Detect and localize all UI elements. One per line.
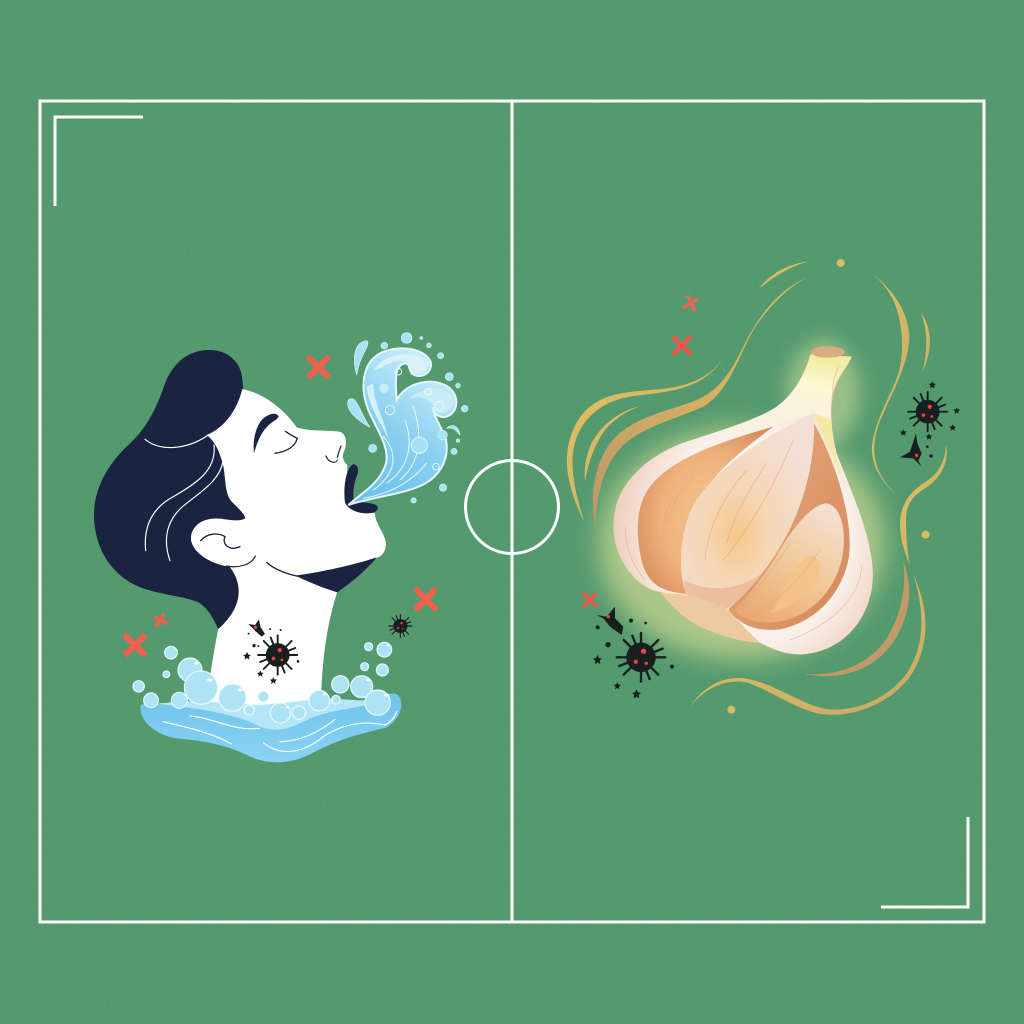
hair [94,350,253,629]
garlic glow [598,340,885,660]
virus: small on neck [243,619,299,684]
water jet from mouth [348,348,456,505]
corner mark: bottom right [881,817,968,907]
water droplets [348,333,468,503]
eyebrow [254,414,279,453]
left clove [638,427,773,594]
corner mark: top left [55,117,143,206]
hair strands [145,435,223,561]
jaw shadow [295,557,377,592]
face lines [201,431,341,577]
garlic base [660,592,760,643]
red cross marks [124,357,437,655]
red cross marks [583,297,697,606]
neck [205,550,343,712]
stem [700,354,852,437]
virus: right of neck [389,614,412,638]
panel: person gargling water [94,333,468,762]
golden dots [727,259,930,714]
right clove highlight [770,556,820,613]
foam bubbles [133,642,392,723]
stem cap [811,346,845,358]
field frame with centre line and centre circle [40,101,984,922]
centre clove [681,413,814,610]
golden aroma swirls [567,261,947,715]
panel: glowing garlic bulb [567,259,960,715]
garlic bulb [613,346,873,654]
virus: lower left small [593,607,674,698]
mouth [344,464,378,513]
virus: upper right [908,392,947,431]
skin [613,354,873,654]
face [191,389,386,576]
right clove cavity [728,423,850,630]
right clove [735,503,844,623]
virus: lower left large [617,633,665,682]
centre clove lower shade [684,573,762,610]
virus: right small [900,381,960,467]
pool of water [140,693,401,762]
virus: on neck [258,635,297,675]
clove veins [625,367,862,640]
